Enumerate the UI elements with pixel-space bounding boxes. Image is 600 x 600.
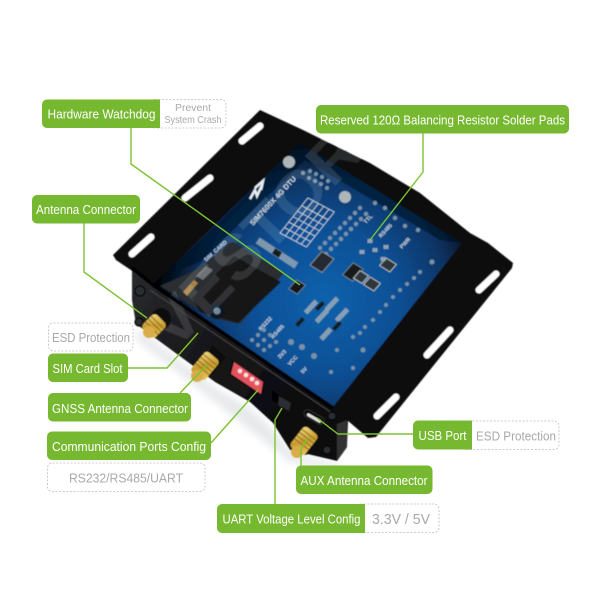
PCB silkscreen text: TTL bbox=[363, 213, 375, 225]
callout: SIM card slot: SIM Card Slot bbox=[52, 362, 123, 376]
PCB silkscreen text: RS485 bbox=[378, 223, 394, 239]
callout: GNSS antenna connector: GNSS Antenna Connector bbox=[52, 402, 188, 416]
PCB silkscreen text: SIM7600X 4G DTU bbox=[248, 174, 298, 227]
PCB silkscreen text: 5V bbox=[300, 366, 309, 375]
PCB silkscreen text bbox=[203, 174, 412, 375]
callout: communication ports config bbox=[47, 432, 211, 460]
callout: UART voltage level config bbox=[217, 504, 439, 533]
jumper table bbox=[280, 198, 334, 247]
watermark: VESTORE bbox=[135, 84, 407, 362]
note: RS232/RS485/UART: RS232/RS485/UART bbox=[69, 472, 183, 486]
SIM card holder bbox=[160, 241, 284, 324]
bracket slots bbox=[132, 126, 496, 416]
PCB silkscreen text: 3V3 bbox=[277, 349, 288, 360]
PCB silkscreen text: RS232 bbox=[258, 316, 274, 332]
enclosure soft shadow bbox=[135, 330, 345, 470]
front face rim highlight bbox=[150, 290, 335, 415]
note: ESD protection: ESD Protection bbox=[52, 331, 130, 345]
callout: reserved resistor pads: Reserved 120Ω Balancing Resistor Solder Pads bbox=[320, 114, 565, 128]
Waveshare logo bbox=[250, 181, 263, 199]
leader line: SIM card slot bbox=[128, 333, 198, 368]
note: ESD protection bbox=[48, 323, 133, 351]
leader line: antenna connector bbox=[84, 223, 147, 318]
callout: AUX antenna connector bbox=[296, 466, 432, 494]
callout: hardware watchdog: Hardware Watchdog bbox=[48, 108, 156, 122]
callout: hardware watchdog: System Crash bbox=[164, 114, 222, 126]
antenna connector 1 bbox=[141, 308, 171, 339]
leader line: USB port bbox=[317, 418, 413, 434]
PCB silkscreen text: RS485 bbox=[270, 324, 286, 340]
DIP switch bbox=[229, 360, 265, 396]
front face rim line bbox=[132, 268, 333, 408]
callout: reserved resistor pads bbox=[316, 105, 569, 134]
callout: hardware watchdog: Prevent bbox=[175, 102, 211, 114]
callout: UART voltage level config: 3.3V / 5V bbox=[372, 512, 430, 528]
callout: AUX antenna connector: AUX Antenna Connector bbox=[300, 474, 428, 488]
enclosure screws bbox=[135, 286, 336, 454]
mounting bracket bbox=[113, 110, 513, 438]
callout: hardware watchdog bbox=[42, 100, 226, 128]
leader line: AUX antenna bbox=[301, 437, 308, 466]
callout: UART voltage level config: UART Voltage Level Config bbox=[222, 512, 361, 526]
AUX antenna connector bbox=[289, 425, 325, 458]
PCB fiducials and vias bbox=[250, 156, 434, 374]
callout: USB port: USB Port bbox=[418, 429, 467, 443]
callout: USB port: ESD Protection bbox=[476, 430, 556, 444]
voltage slide switch bbox=[272, 390, 291, 412]
PCB top dark shading bbox=[165, 143, 462, 275]
callout: antenna connector: Antenna Connector bbox=[36, 203, 136, 217]
device: DTU enclosure bbox=[113, 84, 513, 470]
callout: communication ports config: Communication Ports Config bbox=[52, 440, 206, 454]
callout: antenna connector bbox=[32, 195, 140, 224]
leader line: hardware watchdog bbox=[131, 128, 300, 285]
note: RS232/RS485/UART bbox=[48, 463, 205, 492]
GNSS antenna connector bbox=[190, 345, 226, 382]
PCB silkscreen text: VCC bbox=[287, 355, 299, 367]
leader line: communication ports bbox=[211, 390, 258, 443]
PCB silkscreen text: PWR bbox=[399, 237, 412, 250]
callout: SIM card slot bbox=[48, 354, 128, 382]
callout: USB port bbox=[413, 420, 559, 450]
enclosure front face bbox=[132, 266, 348, 461]
leader line: reserved resistor pads bbox=[370, 133, 423, 240]
callout: GNSS antenna connector bbox=[48, 393, 191, 422]
leader line: GNSS antenna bbox=[180, 365, 207, 393]
PCB silkscreen text: SIM_CARD bbox=[203, 240, 229, 263]
PCB bbox=[153, 143, 462, 407]
enclosure side vent bbox=[337, 420, 347, 461]
USB port bbox=[303, 408, 325, 426]
leader line: UART voltage bbox=[275, 408, 282, 504]
PCB chips and components bbox=[256, 238, 396, 341]
